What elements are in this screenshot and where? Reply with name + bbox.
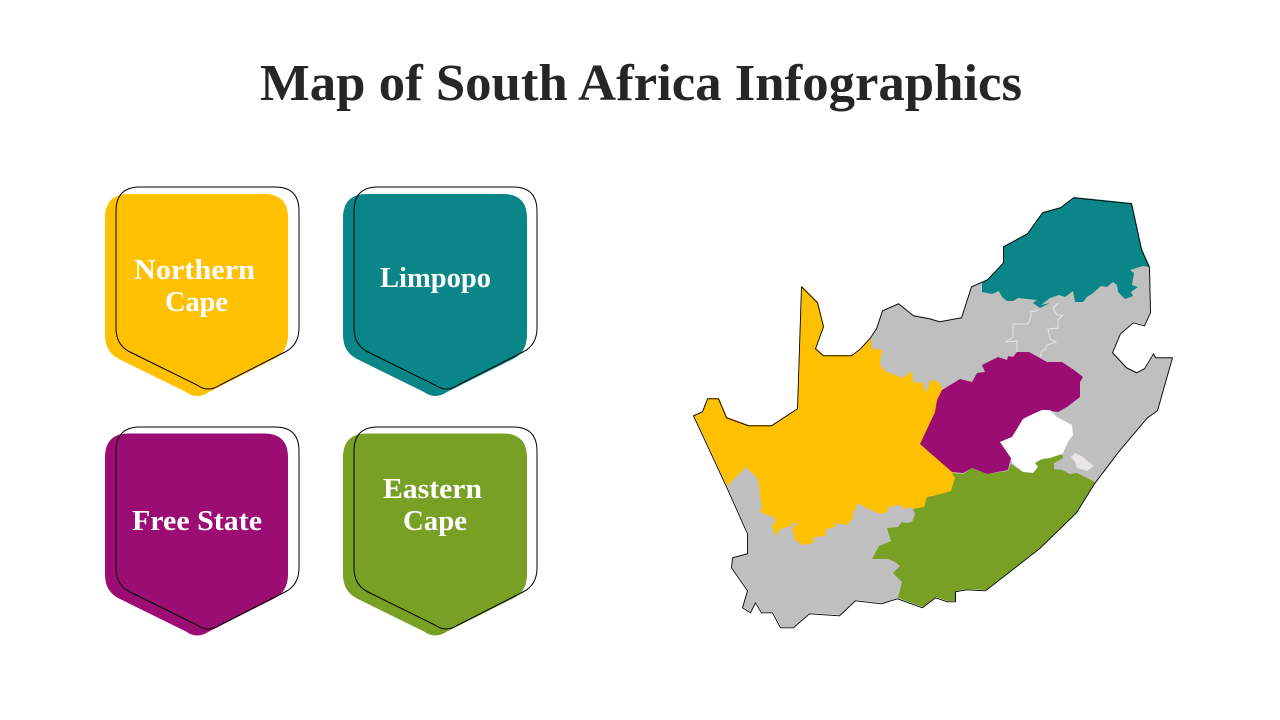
shield: Limpopo <box>343 194 527 396</box>
panel: Limpopo <box>343 187 537 396</box>
panel: Northern Cape <box>105 187 299 396</box>
region: Northern Cape <box>694 286 955 545</box>
label: Limpopo: Limpopo <box>380 263 491 294</box>
province borders <box>1006 303 1063 357</box>
label: Northern Cape: Northern <box>134 255 255 286</box>
title: Map of South Africa Infographics <box>260 55 1022 112</box>
label: Free State: Free State <box>132 506 262 537</box>
region: Eswatini <box>1071 453 1094 471</box>
region: Gray provinces <box>694 197 1173 627</box>
region: Free State <box>920 352 1083 474</box>
region: Eastern Cape <box>872 454 1095 607</box>
panel: Free State <box>105 427 299 636</box>
outline: Eastern Cape <box>354 427 537 629</box>
outline: Free State <box>116 427 299 629</box>
region: Limpopo <box>982 197 1150 308</box>
region: Lesotho <box>1000 410 1073 473</box>
panel: Eastern Cape <box>343 427 537 636</box>
label: Eastern Cape: Eastern <box>383 474 482 505</box>
map of South Africa <box>694 197 1173 628</box>
map outline <box>694 198 1172 628</box>
outline: Northern Cape <box>116 187 299 389</box>
label: Northern Cape: Cape <box>165 287 228 318</box>
shield: Northern Cape <box>105 194 288 396</box>
shield: Eastern Cape <box>343 434 527 636</box>
shield: Free State <box>105 434 288 636</box>
label: Eastern Cape: Cape <box>403 506 467 537</box>
outline: Limpopo <box>354 187 537 389</box>
